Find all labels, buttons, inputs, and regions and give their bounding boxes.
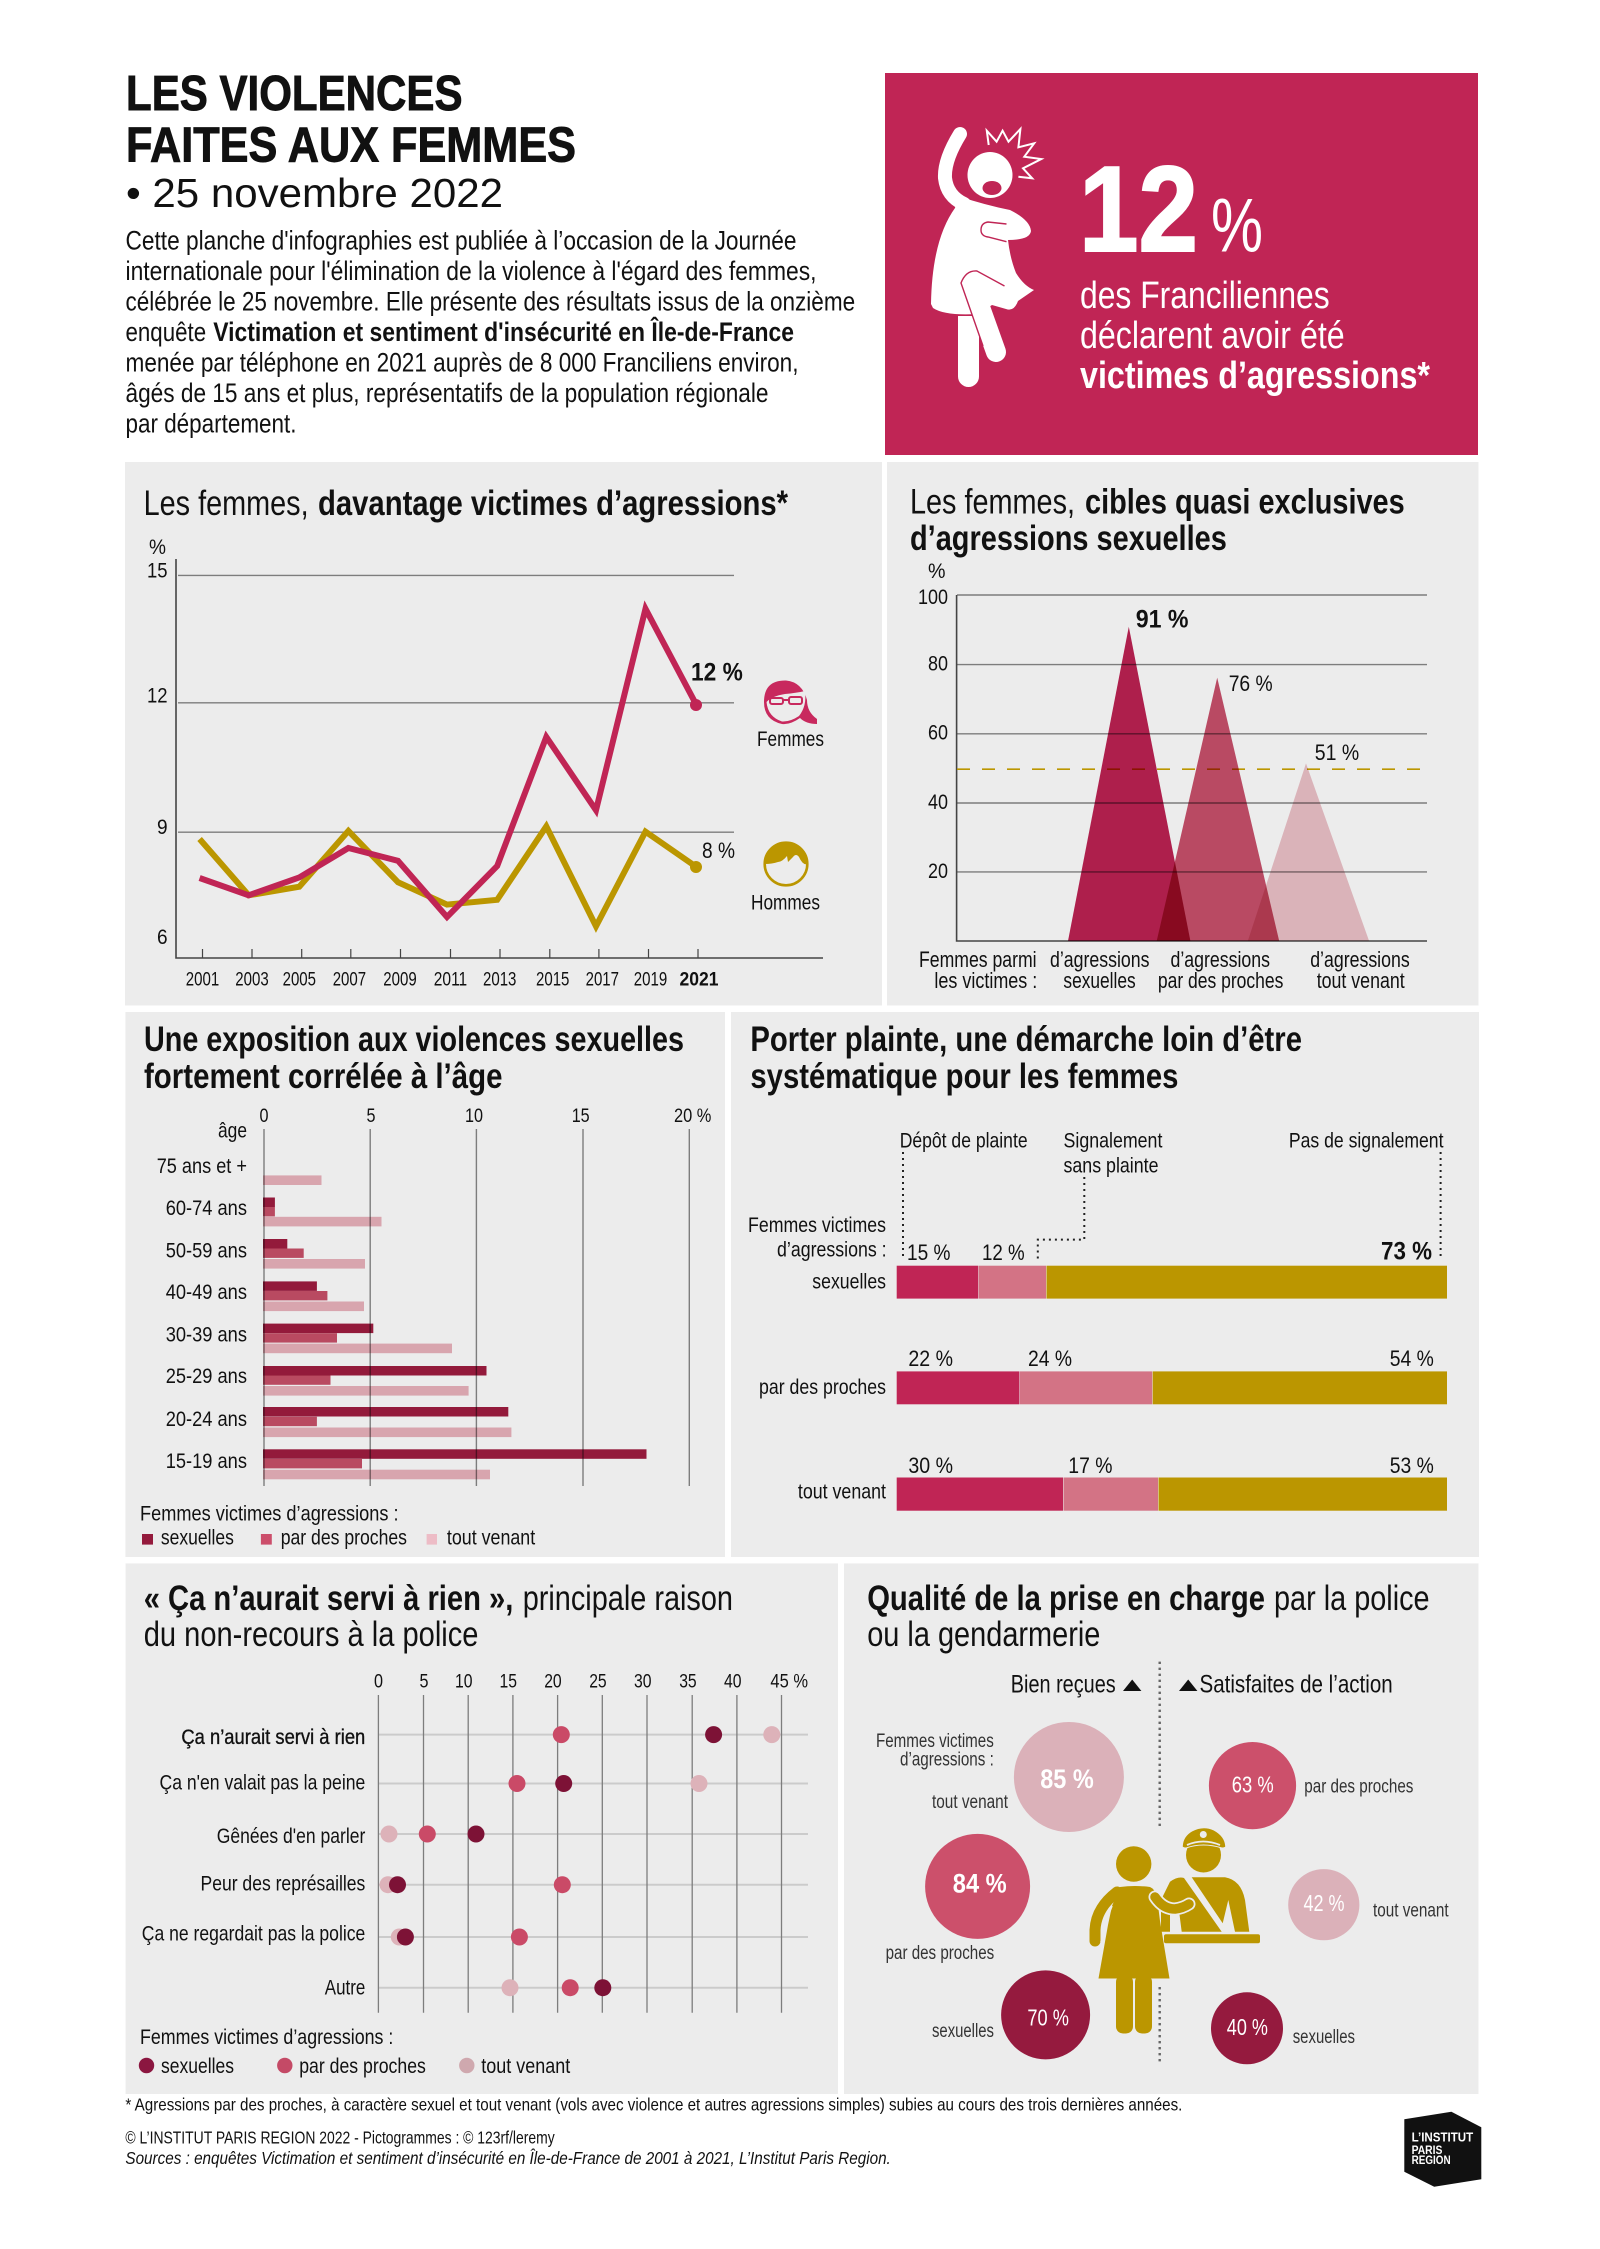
y axis labels: 60 bbox=[928, 721, 948, 745]
key figure caption: victimes d’agressions* bbox=[1080, 355, 1430, 397]
key figure caption: déclarent avoir été bbox=[1080, 315, 1345, 357]
legend: par des proches bbox=[281, 1526, 407, 1550]
bubble labels: d’agressions : bbox=[900, 1750, 994, 1771]
line: women bbox=[200, 609, 702, 917]
logo: L’INSTITUT bbox=[1412, 2131, 1474, 2145]
bubble: satisfaites par des proches 63%: 63 % bbox=[1232, 1771, 1274, 1797]
key figure caption: des Franciliennes bbox=[1080, 275, 1330, 317]
category labels: tout venant bbox=[1317, 968, 1405, 993]
y axis labels: 12 bbox=[147, 684, 168, 708]
pictogram: officer and woman bbox=[1095, 1828, 1260, 2034]
bar: par des proches: 22 % bbox=[908, 1346, 953, 1371]
heading bbox=[910, 483, 1405, 558]
legend: tout venant bbox=[481, 2054, 570, 2078]
panel: dot plot reasons bbox=[126, 1563, 838, 2094]
y axis labels: 15 bbox=[147, 558, 168, 582]
intro text: Victimation et sentiment d'insécurité en Île-de-France bbox=[213, 316, 794, 347]
heading: Une exposition aux violences sexuelles bbox=[144, 1020, 684, 1059]
heading: par la police bbox=[1274, 1579, 1430, 1618]
triangle: tout venant 51% bbox=[1248, 763, 1369, 941]
y axis labels: 80 bbox=[928, 651, 948, 675]
legend: sexuelles bbox=[161, 2054, 234, 2078]
y axis labels: 100 bbox=[918, 585, 948, 609]
panel: quality of police care bbox=[844, 1563, 1478, 2094]
heading bbox=[750, 1020, 1302, 1096]
bubble: bien reçues tout venant 85%: 85 % bbox=[1040, 1764, 1094, 1794]
bar: par des proches bbox=[897, 1346, 1447, 1404]
column headers bbox=[900, 1128, 1444, 1178]
heading: Qualité de la prise en charge bbox=[867, 1579, 1265, 1618]
value labels: 51 % bbox=[1315, 740, 1359, 765]
label femmes: Femmes bbox=[757, 727, 824, 751]
panel: 12% key figure bbox=[885, 73, 1478, 455]
bar: tout venant: 30 % bbox=[908, 1453, 953, 1478]
x axis year labels: 2011 bbox=[434, 970, 467, 990]
reason labels: Ça n'en valait pas la peine bbox=[160, 1771, 365, 1795]
bubble: bien reçues sexuelles 70% bbox=[1001, 1970, 1090, 2059]
label hommes: Hommes bbox=[751, 891, 820, 915]
x axis labels: 20 % bbox=[674, 1106, 711, 1127]
copyright: © L’INSTITUT PARIS REGION 2022 - Pictogrammes : © 123rf/leremy bbox=[125, 2127, 555, 2147]
legend: tout venant bbox=[447, 1526, 535, 1550]
bar: tout venant bbox=[897, 1453, 1447, 1511]
y axis labels: % bbox=[149, 535, 166, 559]
bubble labels: tout venant bbox=[932, 1792, 1009, 1813]
triangle: par des proches 76% bbox=[1157, 678, 1279, 941]
age labels bbox=[157, 1118, 247, 1473]
x axis labels: 5 bbox=[420, 1671, 428, 1692]
dots: sexuelles bbox=[389, 1726, 722, 1996]
age labels: âge bbox=[218, 1118, 247, 1142]
woman bbox=[1095, 1846, 1189, 2034]
bubble labels: Femmes victimes bbox=[876, 1731, 994, 1752]
bubble labels: sexuelles bbox=[1293, 2027, 1355, 2048]
intro text: enquête bbox=[126, 317, 206, 347]
heading: « Ça n’aurait servi à rien », bbox=[144, 1579, 513, 1618]
age labels: 40-49 ans bbox=[166, 1280, 247, 1304]
bars: sexuelles bbox=[263, 1198, 646, 1459]
column headers: Pas de signalement bbox=[1289, 1128, 1444, 1152]
heading: Porter plainte, une démarche loin d’être bbox=[750, 1020, 1302, 1059]
x axis year labels: 2021 bbox=[680, 970, 719, 990]
column headers: sans plainte bbox=[1064, 1154, 1158, 1178]
category labels: d’agressions bbox=[1170, 947, 1270, 972]
bars: tout venant bbox=[263, 1175, 511, 1479]
bar: sexuelles: 73 % bbox=[1381, 1237, 1432, 1265]
value label men: 8 % bbox=[702, 838, 735, 863]
bar: sexuelles: 12 % bbox=[982, 1240, 1025, 1265]
row labels: d’agressions : bbox=[777, 1237, 887, 1261]
x axis year labels: 2001 bbox=[186, 970, 219, 990]
intro text: internationale pour l'élimination de la violence à l'égard des femmes, bbox=[126, 256, 816, 286]
bubble: satisfaites sexuelles 40% bbox=[1211, 1992, 1283, 2064]
dots: par des proches bbox=[419, 1726, 579, 1996]
intro text bbox=[126, 225, 855, 438]
bubble: satisfaites tout venant 42% bbox=[1288, 1869, 1359, 1940]
x axis labels: 10 bbox=[455, 1671, 472, 1692]
x axis labels: 30 bbox=[634, 1671, 652, 1692]
footnote: * Agressions par des proches, à caractère sexuel et tout venant (vols avec violence et autres agressions simples) subies au cours des trois dernières années. bbox=[125, 2095, 1182, 2115]
icon: man bbox=[765, 842, 808, 885]
reason labels: Ça n’aurait servi à rien bbox=[181, 1725, 365, 1749]
x axis year labels: 2007 bbox=[333, 970, 366, 990]
bubble labels bbox=[876, 1731, 1449, 2048]
dots: tout venant bbox=[380, 1726, 780, 1996]
row labels: sexuelles bbox=[812, 1270, 886, 1294]
bubble labels: tout venant bbox=[1373, 1900, 1449, 1921]
reason labels: Ça ne regardait pas la police bbox=[142, 1922, 365, 1946]
age labels: 20-24 ans bbox=[166, 1407, 247, 1431]
reason labels bbox=[142, 1725, 365, 2000]
row labels: par des proches bbox=[759, 1375, 886, 1399]
value labels bbox=[1136, 606, 1359, 765]
icon: woman bbox=[764, 680, 817, 724]
age labels: 25-29 ans bbox=[166, 1364, 247, 1388]
age labels: 75 ans et + bbox=[157, 1154, 247, 1178]
intro text: menée par téléphone en 2021 auprès de 8 000 Franciliens environ, bbox=[126, 348, 798, 378]
heading bbox=[867, 1579, 1430, 1654]
x axis labels bbox=[260, 1106, 711, 1127]
y axis labels: 9 bbox=[157, 815, 168, 839]
bar: sexuelles bbox=[897, 1237, 1447, 1299]
y axis labels bbox=[147, 535, 168, 949]
x axis labels: 35 bbox=[679, 1671, 697, 1692]
bubble: bien reçues par des proches 84%: 84 % bbox=[953, 1868, 1007, 1898]
heading: Les femmes, bbox=[910, 483, 1075, 522]
x axis year labels: 2013 bbox=[483, 970, 516, 990]
heading: davantage victimes d’agressions* bbox=[318, 484, 788, 523]
value labels: 76 % bbox=[1229, 671, 1273, 696]
heading: principale raison bbox=[523, 1579, 733, 1618]
line: men bbox=[200, 826, 702, 926]
y axis labels: % bbox=[928, 559, 946, 583]
intro text: âgés de 15 ans et plus, représentatifs de la population régionale bbox=[126, 378, 768, 408]
bar: tout venant: 17 % bbox=[1068, 1453, 1112, 1478]
panel: line chart women vs men bbox=[125, 462, 882, 1006]
bubble labels: par des proches bbox=[1304, 1776, 1413, 1797]
x axis labels: 0 bbox=[260, 1106, 268, 1127]
heading: fortement corrélée à l’âge bbox=[144, 1057, 502, 1096]
x axis labels: 40 bbox=[724, 1671, 742, 1692]
column header: satisfaites: Satisfaites de l’action bbox=[1200, 1671, 1393, 1699]
y axis labels: 40 bbox=[928, 790, 948, 814]
x axis labels: 15 bbox=[572, 1106, 590, 1127]
category labels: les victimes : bbox=[934, 968, 1037, 993]
x axis labels: 45 % bbox=[770, 1671, 808, 1692]
bubble: bien reçues sexuelles 70%: 70 % bbox=[1027, 2005, 1069, 2031]
bubble: satisfaites tout venant 42%: 42 % bbox=[1304, 1890, 1345, 1916]
sources: Sources : enquêtes Victimation et sentiment d’insécurité en Île-de-France de 2001 à 2021, L’Institut Paris Region. bbox=[125, 2148, 891, 2168]
y axis labels: 6 bbox=[157, 925, 168, 949]
bubble: satisfaites sexuelles 40%: 40 % bbox=[1227, 2014, 1268, 2040]
value labels: 91 % bbox=[1136, 606, 1188, 634]
x axis year labels: 2005 bbox=[283, 970, 316, 990]
bars: par des proches bbox=[263, 1207, 362, 1468]
heading bbox=[144, 484, 788, 523]
panel: triangle chart share of women bbox=[887, 462, 1478, 1006]
category labels: par des proches bbox=[1158, 968, 1283, 993]
x axis labels: 20 bbox=[544, 1671, 562, 1692]
category labels: d’agressions bbox=[1310, 947, 1410, 972]
panel: age bar chart bbox=[125, 1012, 725, 1557]
x axis year labels: 2017 bbox=[586, 970, 619, 990]
bubble: bien reçues par des proches 84% bbox=[925, 1834, 1030, 1939]
column header: bien reçues: Bien reçues bbox=[1011, 1671, 1116, 1699]
big number 12%: 12 bbox=[1079, 141, 1198, 277]
bar: par des proches: 24 % bbox=[1028, 1346, 1072, 1371]
age labels: 15-19 ans bbox=[166, 1449, 247, 1473]
heading: Les femmes, bbox=[144, 484, 309, 523]
x axis labels: 25 bbox=[589, 1671, 607, 1692]
bubble: bien reçues tout venant 85% bbox=[1014, 1722, 1124, 1832]
x axis labels: 15 bbox=[500, 1671, 517, 1692]
logo: REGION bbox=[1412, 2155, 1451, 2167]
intro text: par département. bbox=[126, 408, 296, 438]
reason labels: Peur des représailles bbox=[200, 1872, 365, 1896]
heading: systématique pour les femmes bbox=[750, 1057, 1178, 1096]
value label women: 12 % bbox=[691, 659, 743, 687]
age labels: 30-39 ans bbox=[166, 1322, 247, 1346]
triangle: sexuelles 91% bbox=[1068, 627, 1190, 941]
column headers: Signalement bbox=[1064, 1128, 1162, 1152]
x axis labels: 5 bbox=[366, 1106, 376, 1127]
category labels: d’agressions bbox=[1050, 947, 1150, 972]
x axis labels: 10 bbox=[465, 1106, 483, 1127]
category labels bbox=[919, 947, 1410, 993]
legend: sexuelles bbox=[161, 1526, 234, 1550]
heading: d’agressions sexuelles bbox=[910, 519, 1227, 558]
x axis year labels: 2003 bbox=[235, 970, 269, 990]
title block bbox=[126, 67, 576, 216]
x axis year labels bbox=[186, 970, 719, 990]
bubble labels: sexuelles bbox=[932, 2021, 994, 2042]
row labels bbox=[748, 1213, 887, 1504]
legend bbox=[139, 2025, 570, 2078]
reason labels: Gênées d'en parler bbox=[217, 1824, 365, 1848]
legend bbox=[140, 1502, 535, 1550]
logo: PARIS bbox=[1412, 2145, 1443, 2157]
category labels: sexuelles bbox=[1063, 968, 1136, 993]
key figure caption bbox=[1080, 275, 1430, 397]
legend: par des proches bbox=[299, 2054, 426, 2078]
logo bbox=[1404, 2112, 1481, 2187]
x axis labels: 0 bbox=[374, 1671, 383, 1692]
column headers: Dépôt de plainte bbox=[900, 1128, 1028, 1152]
heading bbox=[144, 1579, 733, 1654]
title block: FAITES AUX FEMMES bbox=[126, 119, 576, 173]
bar: par des proches: 54 % bbox=[1390, 1346, 1434, 1371]
panel: stacked bars complaints bbox=[731, 1012, 1479, 1557]
y axis labels: 20 bbox=[928, 859, 948, 883]
title block: • 25 novembre 2022 bbox=[126, 170, 503, 216]
icon: woman being assaulted bbox=[931, 129, 1041, 387]
officer bbox=[1161, 1828, 1260, 1943]
bubble: satisfaites par des proches 63% bbox=[1209, 1742, 1296, 1829]
age labels: 50-59 ans bbox=[166, 1238, 247, 1262]
x axis year labels: 2015 bbox=[536, 970, 569, 990]
row labels: tout venant bbox=[798, 1480, 886, 1504]
x axis year labels: 2019 bbox=[634, 970, 667, 990]
age labels: 60-74 ans bbox=[166, 1196, 247, 1220]
heading: ou la gendarmerie bbox=[867, 1615, 1100, 1654]
x axis labels bbox=[374, 1671, 808, 1692]
big number 12%: % bbox=[1211, 184, 1263, 268]
bar: tout venant: 53 % bbox=[1390, 1453, 1434, 1478]
heading bbox=[144, 1020, 684, 1096]
bubble labels: par des proches bbox=[886, 1943, 994, 1964]
title block: LES VIOLENCES bbox=[126, 67, 462, 121]
x axis year labels: 2009 bbox=[383, 970, 417, 990]
intro text: Cette planche d'infographies est publiée à l’occasion de la Journée bbox=[126, 225, 796, 255]
row labels: Femmes victimes bbox=[748, 1213, 886, 1237]
category labels: Femmes parmi bbox=[919, 947, 1037, 972]
heading: cibles quasi exclusives bbox=[1085, 483, 1405, 522]
legend: Femmes victimes d’agressions : bbox=[140, 2025, 393, 2049]
intro text: célébrée le 25 novembre. Elle présente des résultats issus de la onzième bbox=[126, 287, 855, 317]
reason labels: Autre bbox=[325, 1976, 365, 2000]
bar: sexuelles: 15 % bbox=[907, 1240, 950, 1265]
heading: du non-recours à la police bbox=[144, 1615, 478, 1654]
legend: Femmes victimes d’agressions : bbox=[140, 1502, 399, 1526]
y axis labels bbox=[918, 559, 948, 883]
